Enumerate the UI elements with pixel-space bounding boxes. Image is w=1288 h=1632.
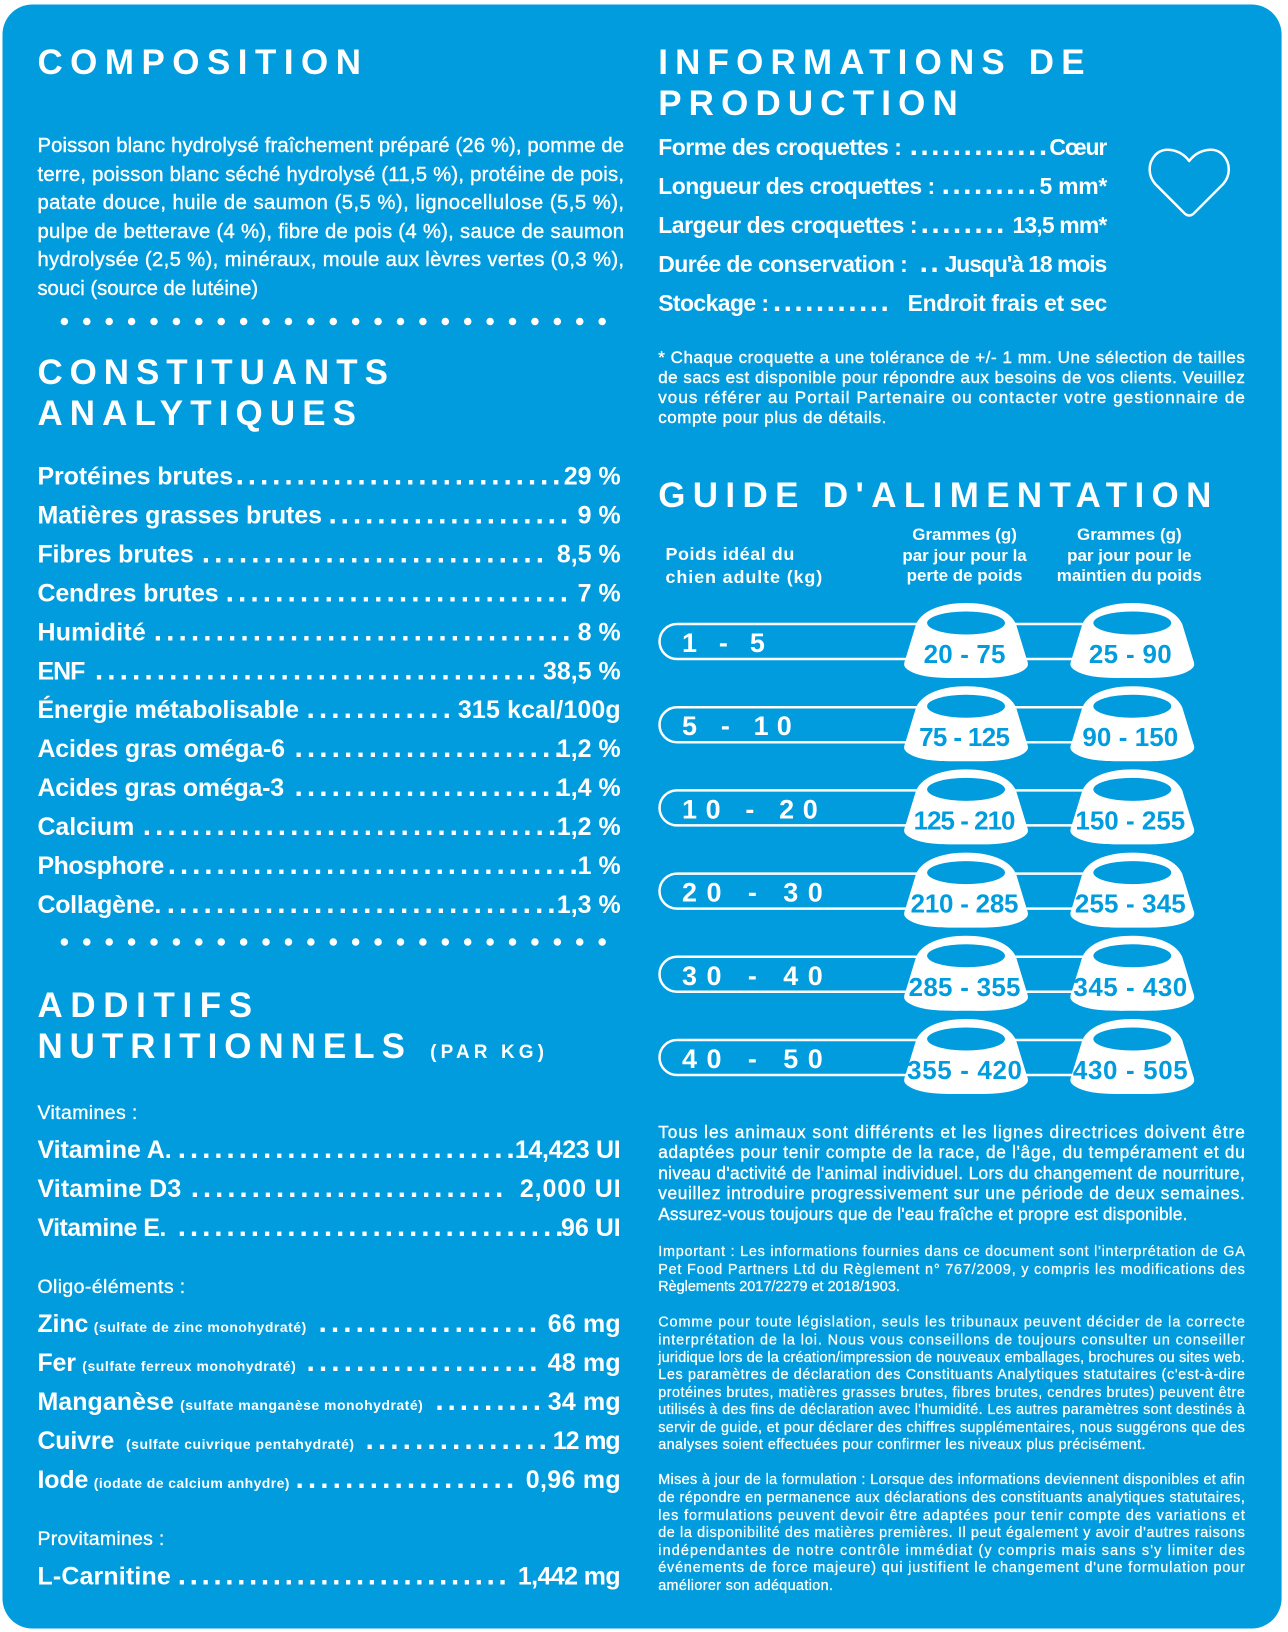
text block: tolerance footnote: compte pour plus de détails. — [658, 408, 886, 427]
row: largeur: Largeur des croquettes : — [658, 212, 918, 238]
text block: tolerance footnote — [658, 348, 1245, 427]
feeding row: 10-20 kg: 10 - 20 — [682, 794, 818, 824]
heading: additifs nutritionnels — [37, 986, 544, 1066]
row: fer: (sulfate ferreux monohydraté) — [82, 1358, 296, 1374]
feeding row: 10-20 kg: 125 - 210 — [914, 805, 1015, 835]
text block: feeding guidance: veuillez introduire progressivement sur une période de deux semaines. — [658, 1183, 1245, 1203]
row: fibres brutes: ............................ — [202, 536, 548, 570]
row: matières grasses brutes: 9 % — [578, 501, 621, 530]
heading: composition: COMPOSITION — [37, 43, 361, 82]
row: cendres brutes: Cendres brutes — [37, 579, 219, 608]
row: fer: Fer — [37, 1349, 76, 1377]
row: iode: .................. — [296, 1462, 518, 1495]
row: cuivre: (sulfate cuivrique pentahydraté) — [126, 1436, 354, 1452]
row: acides gras oméga-3: 1,4 % — [557, 774, 621, 802]
feeding row: 20-30 kg: 210 - 285 — [911, 889, 1018, 919]
row: stockage: Stockage : — [658, 290, 769, 316]
feeding row: 5-10 kg: 5 - 10 — [682, 711, 792, 741]
row: énergie métabolisable: 315 kcal/100g — [458, 696, 621, 724]
row: collagène: Collagène. — [37, 891, 161, 919]
subheading: oligo-éléments: Oligo-éléments : — [37, 1276, 185, 1298]
row: iode: Iode — [37, 1466, 88, 1494]
heading: constituants analytiques — [37, 353, 388, 433]
row: cendres brutes: 7 % — [578, 579, 621, 608]
table header: weight loss column: par jour pour la — [902, 546, 1027, 565]
text block: formulation updates: améliorer son adéquation. — [658, 1578, 833, 1594]
heading: additifs nutritionnels: ADDITIFS — [37, 986, 252, 1025]
table header: maintenance column: Grammes (g) — [1077, 525, 1182, 544]
text block: important notice: Important : Les informations fournies dans ce document sont l'interprétation de GA — [658, 1244, 1245, 1260]
row: fibres brutes: 8,5 % — [557, 540, 621, 569]
feeding row: 20-30 kg: 255 - 345 — [1075, 889, 1186, 919]
text block: feeding guidance: Assurez-vous toujours que de l'eau fraîche et propre est disponible. — [658, 1204, 1187, 1224]
text block: formulation updates: les formulations peuvent devoir être adaptées pour tenir compte des variations et — [658, 1508, 1245, 1524]
row: protéines brutes — [37, 458, 621, 492]
row: longueur: Longueur des croquettes : — [658, 173, 935, 199]
row: iode: 0,96 mg — [526, 1466, 621, 1494]
table header: weight column — [666, 544, 822, 587]
row: matières grasses brutes: Matières grasses brutes — [37, 501, 322, 530]
heading: additifs nutritionnels: (PAR KG) — [430, 1042, 544, 1063]
row: iode — [37, 1462, 621, 1495]
feeding row: 20-30 kg — [660, 853, 1194, 928]
text block: legislation notice: interprétation de la loi. Nous vous conseillons de toujours consulter un conseiller — [658, 1332, 1245, 1348]
text block: feeding guidance: niveau d'activité de l'animal individuel. Lors du changement de nourriture, — [658, 1163, 1245, 1183]
row: vitamine e — [37, 1210, 621, 1243]
row: énergie métabolisable: ............ — [307, 692, 455, 725]
row: manganèse: 34 mg — [548, 1388, 621, 1416]
text block: important notice — [658, 1244, 1245, 1295]
row: zinc — [37, 1306, 621, 1339]
row: forme — [658, 129, 1107, 162]
text block: legislation notice: protéines brutes, matières grasses brutes, fibres brutes, cendres brutes) peuvent être — [658, 1385, 1245, 1401]
row: enf: ENF — [37, 657, 85, 686]
row: humidité: 8 % — [578, 618, 621, 647]
row: manganèse: Manganèse — [37, 1388, 174, 1416]
row: forme: Cœur — [1049, 134, 1107, 160]
row: phosphore: 1 % — [578, 852, 621, 880]
row: enf: 38,5 % — [543, 657, 621, 686]
row: stockage: ........... — [773, 285, 891, 318]
feeding row: 40-50 kg: 355 - 420 — [907, 1055, 1022, 1085]
heading: additifs nutritionnels: NUTRITIONNELS — [37, 1027, 405, 1066]
row: matières grasses brutes — [37, 497, 621, 531]
row: fibres brutes: Fibres brutes — [37, 540, 194, 569]
row: zinc: 66 mg — [548, 1310, 621, 1338]
text block: tolerance footnote: vous référer au Portail Partenaire ou contacter votre gestionnaire de — [658, 388, 1245, 407]
row: protéines brutes: Protéines brutes — [37, 462, 233, 491]
heading: guide d'alimentation: GUIDE D'ALIMENTATION — [658, 476, 1211, 515]
row: vitamine a — [37, 1132, 621, 1165]
row: acides gras oméga-3: ...................... — [295, 770, 567, 803]
subheading: provitamines: Provitamines : — [37, 1528, 164, 1550]
row: vitamine d3: 2,000 UI — [520, 1175, 621, 1203]
row: collagène: ................................. — [167, 887, 572, 920]
row: acides gras oméga-6: 1,2 % — [557, 735, 621, 763]
feeding row: 5-10 kg: 90 - 150 — [1082, 722, 1178, 752]
feeding row: 1-5 kg — [660, 603, 1194, 678]
row: longueur — [658, 168, 1107, 201]
row: collagène — [37, 887, 621, 920]
row: cendres brutes: ............................ — [226, 575, 572, 609]
row: acides gras oméga-6: Acides gras oméga-6 — [37, 735, 285, 763]
row: phosphore: .................................. — [168, 848, 582, 881]
row: l-carnitine — [37, 1558, 621, 1592]
table header: weight column: Poids idéal du — [666, 544, 794, 564]
row: vitamine a: 14,423 UI — [515, 1136, 621, 1164]
table header: maintenance column: par jour pour le — [1067, 546, 1191, 565]
feeding row: 40-50 kg: 430 - 505 — [1073, 1055, 1188, 1085]
feeding row: 5-10 kg — [660, 686, 1194, 761]
text block: feeding guidance: Tous les animaux sont différents et les lignes directrices doivent être — [658, 1122, 1245, 1142]
row: largeur — [658, 207, 1107, 240]
row: fer — [37, 1345, 621, 1378]
feeding row: 10-20 kg — [660, 769, 1194, 844]
feeding row: 30-40 kg: 30 - 40 — [682, 961, 823, 991]
heading: informations de production: PRODUCTION — [658, 84, 958, 123]
row: zinc: .................. — [319, 1306, 541, 1339]
row: acides gras oméga-6: ...................... — [295, 731, 567, 764]
row: collagène: 1,3 % — [557, 891, 621, 919]
row: calcium: 1,2 % — [557, 813, 621, 841]
feeding row: 30-40 kg: 345 - 430 — [1073, 972, 1187, 1002]
text block: formulation updates: de la disponibilité des matières premières. Il peut également y avoir d'autres raisons — [658, 1525, 1245, 1541]
text block: feeding guidance — [658, 1122, 1245, 1224]
row: énergie métabolisable — [37, 692, 621, 725]
table header: maintenance column: maintien du poids — [1057, 566, 1202, 585]
row: matières grasses brutes: .................... — [329, 497, 572, 531]
row: enf: .................................... — [95, 653, 540, 687]
row: calcium: ................................... — [143, 809, 572, 842]
row: fer: 48 mg — [548, 1349, 621, 1377]
feeding row: 30-40 kg — [660, 936, 1194, 1011]
text block: tolerance footnote: de sacs est disponible pour répondre aux besoins de vos clients. Veuillez — [658, 368, 1245, 387]
text block: formulation updates — [658, 1472, 1245, 1594]
text block: composition ingredients: souci (source de lutéine) — [37, 278, 258, 300]
text block: composition ingredients: hydrolysée (2,5 %), minéraux, moule aux lèvres vertes (0,3 %), — [37, 249, 624, 271]
table header: weight column: chien adulte (kg) — [666, 567, 822, 587]
row: vitamine e: ................................ — [178, 1210, 567, 1243]
row: fibres brutes — [37, 536, 621, 570]
row: vitamine e: Vitamine E. — [37, 1214, 166, 1242]
table header: maintenance column — [1057, 525, 1202, 585]
text block: formulation updates: Mises à jour de la formulation : Lorsque des informations deviennent disponibles et afin — [658, 1472, 1245, 1488]
feeding row: 1-5 kg: 20 - 75 — [924, 639, 1005, 669]
row: durée: Durée de conservation : — [658, 251, 908, 277]
row: stockage: Endroit frais et sec — [908, 290, 1108, 316]
row: longueur: 5 mm* — [1039, 173, 1107, 199]
feeding row: 40-50 kg: 40 - 50 — [682, 1044, 823, 1074]
row: cuivre: 12 mg — [553, 1427, 621, 1455]
text block: composition ingredients — [37, 135, 624, 300]
text block: composition ingredients: patate douce, huile de saumon (5,5 %), lignocellulose (5,5 %), — [37, 192, 624, 214]
row: vitamine d3 — [37, 1171, 621, 1204]
list: analytical constituents — [37, 458, 621, 920]
row: acides gras oméga-3: Acides gras oméga-3 — [37, 774, 284, 802]
row: énergie métabolisable: Énergie métabolisable — [37, 695, 299, 724]
heading: informations de production — [658, 43, 1085, 123]
heading: constituants analytiques: ANALYTIQUES — [37, 394, 356, 433]
subheading: vitamines: Vitamines : — [37, 1102, 137, 1124]
text block: feeding guidance: adaptées pour tenir compte de la race, de l'âge, du tempérament et du — [658, 1142, 1245, 1162]
heading: constituants analytiques: CONSTITUANTS — [37, 353, 388, 392]
heading: informations de production: INFORMATIONS DE — [658, 43, 1085, 82]
row: stockage — [658, 285, 1108, 318]
feeding row: 10-20 kg: 150 - 255 — [1075, 805, 1185, 835]
text block: legislation notice: utilisés à des fins de déclaration avec l'humidité. Les autres paramètres sont destinés à — [658, 1402, 1245, 1418]
row: humidité: Humidité — [37, 618, 146, 647]
icon: heart-shaped kibble — [1150, 150, 1229, 216]
text block: legislation notice: servir de guide, et pour déclarer des chiffres supplémentaires, nous suggérons que des — [658, 1420, 1245, 1436]
text block: legislation notice: juridique lors de la création/impression de nouveaux emballages, brochures ou sites web. — [657, 1350, 1245, 1366]
row: longueur: ......... — [942, 168, 1038, 201]
row: vitamine a: ............................ — [178, 1132, 519, 1165]
text block: formulation updates: événements de force majeure) qui justifient le changement d'une formulation pour — [658, 1560, 1245, 1576]
row: forme: Forme des croquettes : — [658, 134, 902, 160]
text block: composition ingredients: Poisson blanc hydrolysé fraîchement préparé (26 %), pomme de — [37, 135, 624, 157]
row: zinc: Zinc — [37, 1310, 88, 1338]
text block: composition ingredients: pulpe de betterave (4 %), fibre de pois (4 %), sauce de saumon — [37, 221, 624, 243]
text block: composition ingredients: terre, poisson blanc séché hydrolysé (11,5 %), protéine de pois, — [37, 164, 624, 186]
feeding row: 5-10 kg: 75 - 125 — [919, 722, 1010, 752]
row: cendres brutes — [37, 575, 621, 609]
row: durée — [658, 246, 1107, 279]
row: manganèse — [37, 1384, 621, 1417]
row: phosphore: Phosphore — [37, 852, 164, 880]
text block: formulation updates: indépendantes de notre contrôle immédiat (y compris mais sans s'y limiter des — [658, 1543, 1245, 1559]
row: iode: (iodate de calcium anhydre) — [94, 1475, 289, 1491]
table header: weight loss column — [902, 525, 1027, 585]
row: l-carnitine: L-Carnitine — [37, 1562, 171, 1591]
text block: legislation notice: analyses soient effectuées pour confirmer les niveaux plus précisément. — [658, 1437, 1145, 1453]
list: vitamins — [37, 1132, 621, 1243]
row: cuivre: ............... — [365, 1423, 551, 1456]
row: vitamine d3: .......................... — [191, 1171, 507, 1204]
row: durée: .. — [920, 246, 941, 279]
row: calcium: Calcium — [37, 813, 134, 841]
list: trace elements — [37, 1306, 621, 1495]
feeding row: 1-5 kg: 25 - 90 — [1089, 639, 1172, 669]
row: largeur: 13,5 mm* — [1012, 212, 1107, 238]
text block: tolerance footnote: * Chaque croquette a une tolérance de +/- 1 mm. Une sélection de tailles — [658, 348, 1245, 367]
row: manganèse: (sulfate manganèse monohydraté) — [180, 1397, 423, 1413]
row: forme: ............. — [910, 129, 1050, 162]
row: cuivre — [37, 1423, 621, 1456]
row: vitamine a: Vitamine A. — [37, 1136, 172, 1164]
row: durée: Jusqu'à 18 mois — [945, 251, 1107, 277]
table header: weight loss column: perte de poids — [907, 566, 1022, 585]
row: protéines brutes: ........................... — [236, 458, 564, 492]
text block: legislation notice: Les paramètres de déclaration des Constituants Analytiques statutaires (c'est-à-dire — [658, 1367, 1245, 1383]
row: vitamine d3: Vitamine D3 — [37, 1175, 181, 1203]
row: zinc: (sulfate de zinc monohydraté) — [94, 1319, 306, 1335]
row: l-carnitine: ............................ — [178, 1558, 510, 1592]
feeding row: 1-5 kg: 1 - 5 — [682, 628, 765, 658]
row: protéines brutes: 29 % — [564, 462, 621, 491]
feeding row: 20-30 kg: 20 - 30 — [682, 878, 823, 908]
row: cuivre: Cuivre — [37, 1427, 114, 1455]
text block: important notice: Pet Food Partners Ltd du Règlement n° 767/2009, y compris les modifications des — [658, 1262, 1245, 1278]
row: fer: ................... — [307, 1345, 542, 1378]
text block: formulation updates: de répondre en permanence aux déclarations des constituants analytiques statutaires, — [658, 1490, 1245, 1506]
row: acides gras oméga-6 — [37, 731, 621, 764]
feeding row: 30-40 kg: 285 - 355 — [909, 972, 1020, 1002]
row: vitamine e: 96 UI — [561, 1214, 621, 1242]
table header: weight loss column: Grammes (g) — [912, 525, 1017, 544]
row: l-carnitine: 1,442 mg — [518, 1562, 621, 1591]
text block: important notice: Règlements 2017/2279 et 2018/1903. — [658, 1279, 900, 1295]
feeding row: 40-50 kg — [660, 1019, 1194, 1094]
row: manganèse: ......... — [435, 1384, 545, 1417]
text block: legislation notice — [657, 1314, 1245, 1453]
row: largeur: ........ — [921, 207, 1007, 240]
row: acides gras oméga-3 — [37, 770, 621, 803]
text block: legislation notice: Comme pour toute législation, seuls les tribunaux peuvent décider de la correcte — [658, 1314, 1245, 1330]
row: humidité: .................................. — [154, 614, 574, 648]
list: production information — [658, 129, 1108, 318]
